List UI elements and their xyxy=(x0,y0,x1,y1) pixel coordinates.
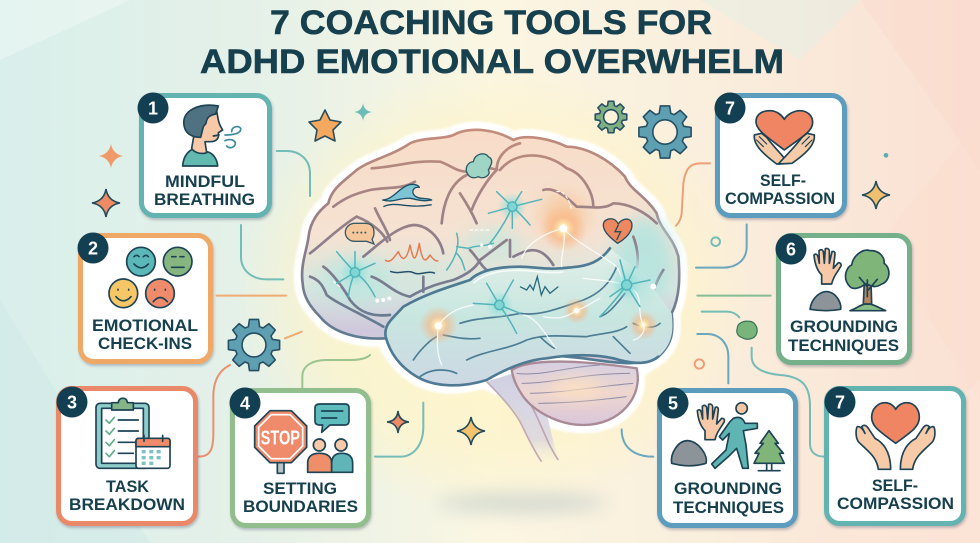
card 4: setting boundaries xyxy=(230,388,368,526)
icon: hand, rock and tree xyxy=(810,248,889,311)
sparkle icons xyxy=(92,103,890,445)
card 1: mindful breathing: BREATHING xyxy=(154,190,255,209)
icon: orange wave chart xyxy=(385,243,438,261)
badge 7: 7 xyxy=(725,98,735,118)
icon: speech bubble xyxy=(345,223,374,244)
temporal lobe xyxy=(385,248,672,385)
ground shadow xyxy=(437,494,607,512)
gear icons xyxy=(228,101,691,371)
icon: heart above hands xyxy=(856,403,935,469)
card 7: self-compassion top: COMPASSION xyxy=(725,189,835,208)
cerebellum xyxy=(512,362,638,425)
cerebrum xyxy=(302,130,679,363)
card 5: grounding techniques: GROUNDING xyxy=(674,479,782,498)
card 1: mindful breathing xyxy=(138,92,270,216)
title: 7 COACHING TOOLS FOR xyxy=(270,4,712,42)
badge 7: 7 xyxy=(835,392,845,412)
card 7: self-compassion top xyxy=(714,92,844,216)
title: ADHD EMOTIONAL OVERWHELM xyxy=(200,43,784,81)
neurons xyxy=(337,192,650,333)
colour tints xyxy=(320,193,673,303)
card 5: grounding techniques xyxy=(658,388,796,526)
card 2: emotional check-ins xyxy=(78,232,210,362)
icon: small wave chart xyxy=(520,277,558,295)
badge 6: 6 xyxy=(786,240,796,260)
badge 3: 3 xyxy=(67,392,77,412)
icon: wave xyxy=(383,184,432,207)
white electric lines xyxy=(333,191,644,365)
white dots xyxy=(375,224,656,330)
card 6: grounding techniques: TECHNIQUES xyxy=(788,336,899,355)
badge 1: 1 xyxy=(148,98,158,118)
icon: star xyxy=(309,110,341,141)
card 6: grounding techniques: GROUNDING xyxy=(790,317,898,336)
icon: broken heart xyxy=(603,219,632,243)
glow spots xyxy=(540,205,587,252)
icon: emotion faces xyxy=(109,247,192,308)
badge 4: 4 xyxy=(240,394,250,414)
card 3: task breakdown: BREAKDOWN xyxy=(69,495,185,514)
card 6: grounding techniques xyxy=(776,234,910,362)
sulci xyxy=(310,143,672,327)
card 3: task breakdown: TASK xyxy=(106,477,150,496)
icon: blue wave line xyxy=(390,271,435,274)
connector lines, left xyxy=(198,151,423,457)
card 7: self-compassion bottom: COMPASSION xyxy=(837,494,954,513)
icon: clipboard and calendar xyxy=(96,398,170,468)
icon: heart in hands xyxy=(754,111,814,164)
card 7: self-compassion bottom: SELF- xyxy=(872,476,918,495)
card 4: setting boundaries: SETTING xyxy=(263,479,337,498)
brain halo xyxy=(302,130,679,425)
icon: stop sign and people: STOP xyxy=(261,427,300,450)
brain illustration xyxy=(302,130,679,462)
card 1: mindful breathing: MINDFUL xyxy=(165,172,245,191)
card 7: self-compassion top: SELF- xyxy=(760,171,806,190)
connector lines, right xyxy=(622,153,888,457)
badge 2: 2 xyxy=(88,238,98,258)
brain glow xyxy=(235,65,755,515)
brain stem xyxy=(487,373,558,462)
temporal folds xyxy=(413,267,660,377)
badge 5: 5 xyxy=(668,394,678,414)
card 2: emotional check-ins: CHECK-INS xyxy=(98,334,192,353)
card 5: grounding techniques: TECHNIQUES xyxy=(673,498,784,517)
title xyxy=(200,4,784,81)
card 2: emotional check-ins: EMOTIONAL xyxy=(92,316,198,335)
card 7: self-compassion bottom xyxy=(824,386,964,524)
card 4: setting boundaries: BOUNDARIES xyxy=(243,497,358,516)
icon: person breathing xyxy=(183,105,241,166)
icon: hand, rock, walker, tree xyxy=(671,403,784,471)
icon: cloud xyxy=(466,154,492,178)
card 3: task breakdown xyxy=(56,386,196,524)
